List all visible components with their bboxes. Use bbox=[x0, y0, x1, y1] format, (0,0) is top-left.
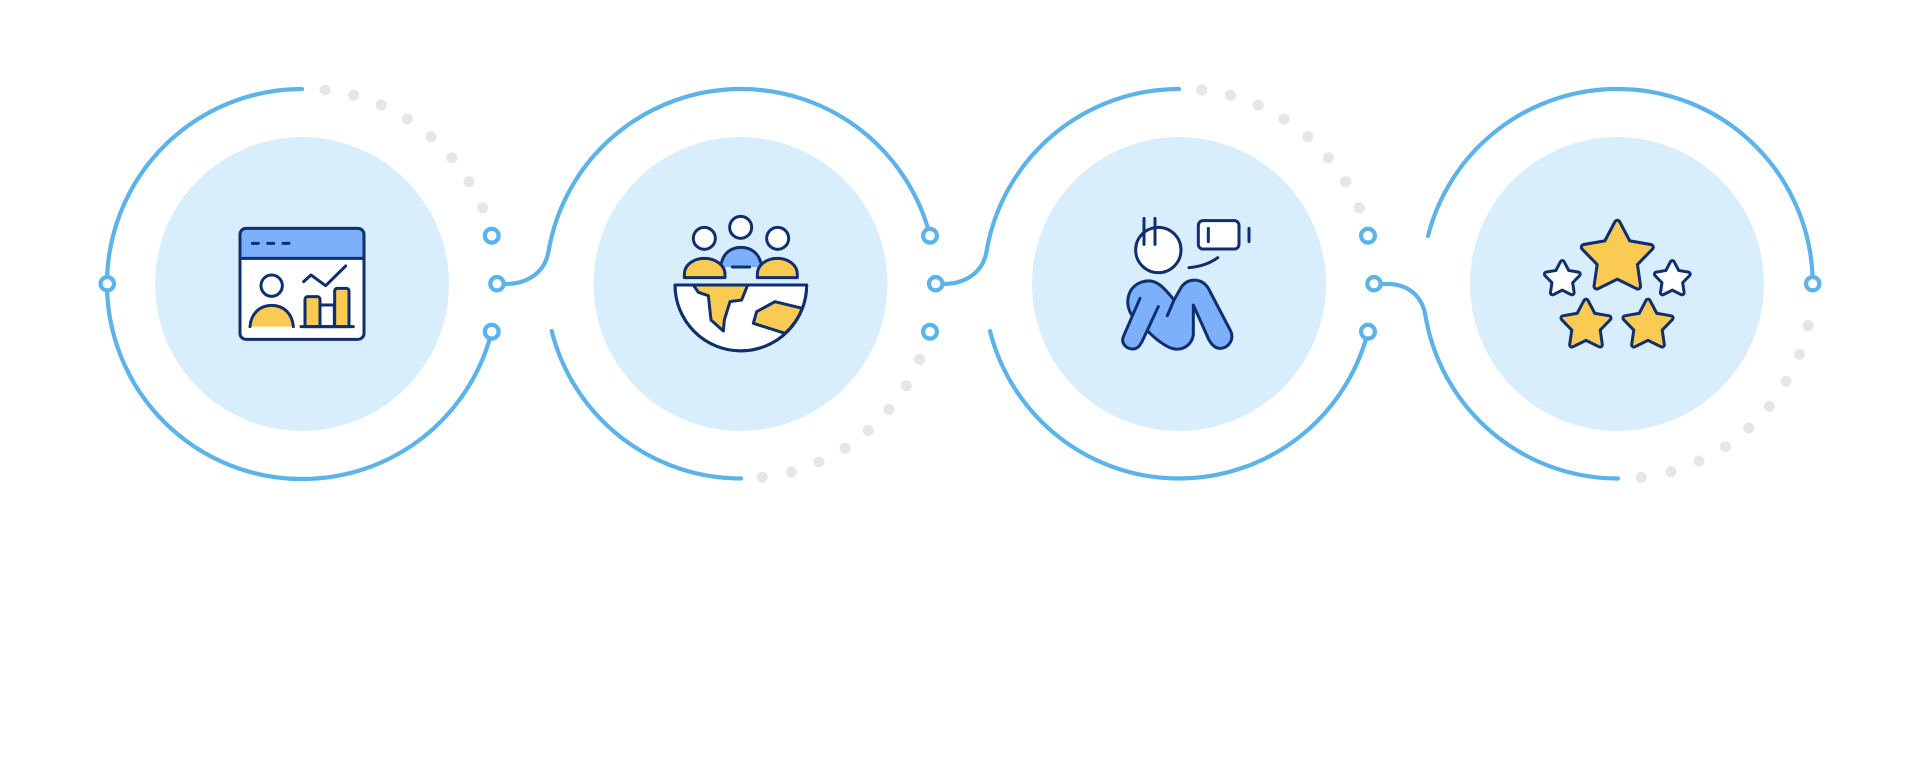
large gold star bbox=[1584, 223, 1651, 286]
background circle 3 bbox=[1032, 137, 1326, 431]
lower gold star left bbox=[1563, 301, 1609, 345]
ring 1 bbox=[107, 89, 492, 479]
nodes 3 bbox=[929, 229, 1375, 339]
dotted arc 2 bbox=[757, 354, 925, 483]
small white star left bbox=[1546, 263, 1578, 293]
background circle 1 bbox=[155, 137, 449, 431]
panel: step 1 analytics bbox=[101, 84, 499, 479]
small white star right bbox=[1656, 263, 1688, 293]
icon: five stars bbox=[1546, 223, 1688, 345]
upper ring 4 bbox=[1428, 89, 1813, 284]
lower ring 3 bbox=[990, 331, 1368, 479]
background circle 4 bbox=[1470, 137, 1764, 431]
icon: people around half globe bbox=[675, 216, 807, 351]
nodes 2 bbox=[490, 229, 937, 339]
icon: tired person with low battery bbox=[1123, 218, 1249, 349]
panel: step 3 exhausted person bbox=[929, 84, 1375, 479]
upper ring 3 with connector from step 2 bbox=[936, 89, 1179, 284]
dotted arc 4 bbox=[1636, 320, 1814, 483]
lower gold star right bbox=[1625, 301, 1671, 345]
dotted arc 1 bbox=[320, 84, 488, 213]
panel: step 4 star rating bbox=[1367, 89, 1819, 483]
dotted arc 3 bbox=[1196, 84, 1365, 213]
panel: step 2 global community bbox=[490, 89, 937, 483]
background circle 2 bbox=[594, 137, 888, 431]
lower ring 2 bbox=[552, 331, 741, 479]
lower ring 4 with connector from step 3 bbox=[1374, 284, 1618, 479]
upper ring 2 with connector from step 1 bbox=[497, 89, 930, 284]
nodes 4 bbox=[1367, 277, 1819, 290]
nodes 1 bbox=[101, 229, 499, 339]
icon: dashboard window with user and chart bbox=[240, 228, 364, 339]
